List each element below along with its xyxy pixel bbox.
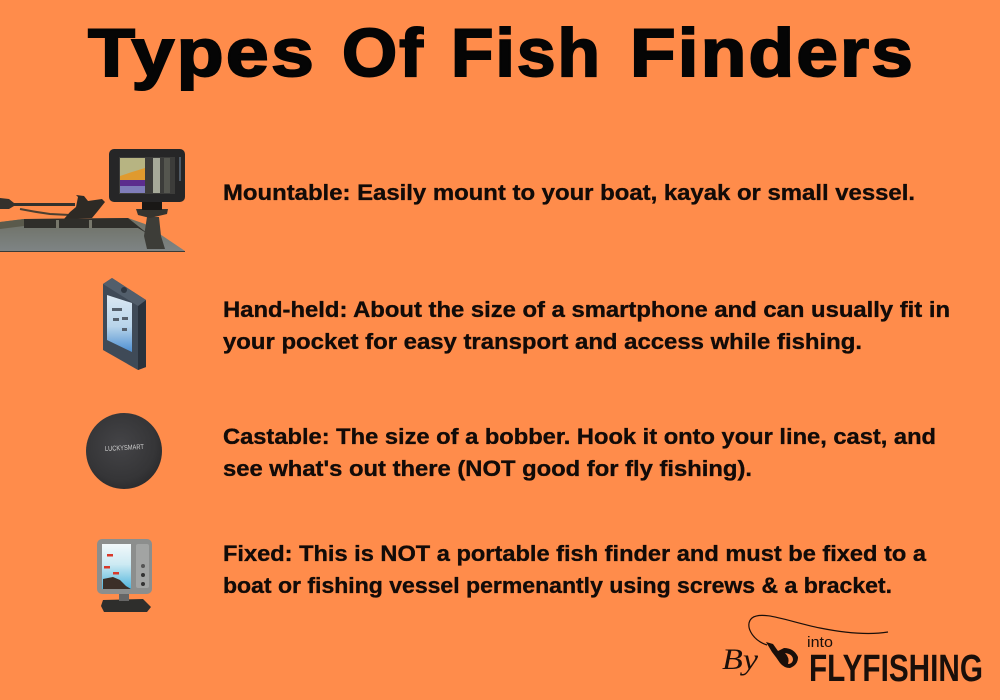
- text: castable: see what's out there (NOT good for fly fishing).: [223, 456, 752, 481]
- mount: [144, 217, 165, 249]
- icon: castable fish finder: LUCKYSMART: [105, 444, 145, 453]
- icon: fixed fish finder: [97, 539, 152, 612]
- logo: by into flyfishing: [722, 615, 983, 690]
- text: castable: [223, 424, 936, 481]
- logo fly line: [749, 615, 888, 645]
- text: castable: Castable: The size of a bobber. Hook it onto your line, cast, and: [223, 424, 936, 449]
- title: [88, 15, 915, 91]
- boat hull: [0, 218, 185, 251]
- title: Fish: [451, 15, 602, 91]
- icon: mountable fish finder on boat: [0, 149, 185, 252]
- text: fixed: Fixed: This is NOT a portable fish finder and must be fixed to a: [223, 541, 927, 566]
- monitor: [109, 149, 185, 202]
- text: fixed: [223, 541, 927, 598]
- icon: castable fish finder: [86, 413, 162, 489]
- text: fixed: boat or fishing vessel permenantly using screws & a bracket.: [223, 573, 892, 598]
- text: hand-held: your pocket for easy transport and access while fishing.: [223, 329, 862, 354]
- trolling arm: [0, 198, 75, 209]
- logo word: into: into: [807, 634, 833, 651]
- icon: hand-held fish finder: [103, 278, 146, 370]
- logo fly icon: [766, 642, 798, 668]
- text: hand-held: [223, 297, 950, 354]
- logo script: by: By: [722, 643, 759, 676]
- text: hand-held: Hand-held: About the size of a smartphone and can usually fit in: [223, 297, 950, 322]
- title: Types: [88, 15, 316, 91]
- title: Of: [342, 15, 425, 91]
- text: mountable: Mountable: Easily mount to your boat, kayak or small vessel.: [223, 180, 915, 205]
- title: Finders: [630, 15, 915, 91]
